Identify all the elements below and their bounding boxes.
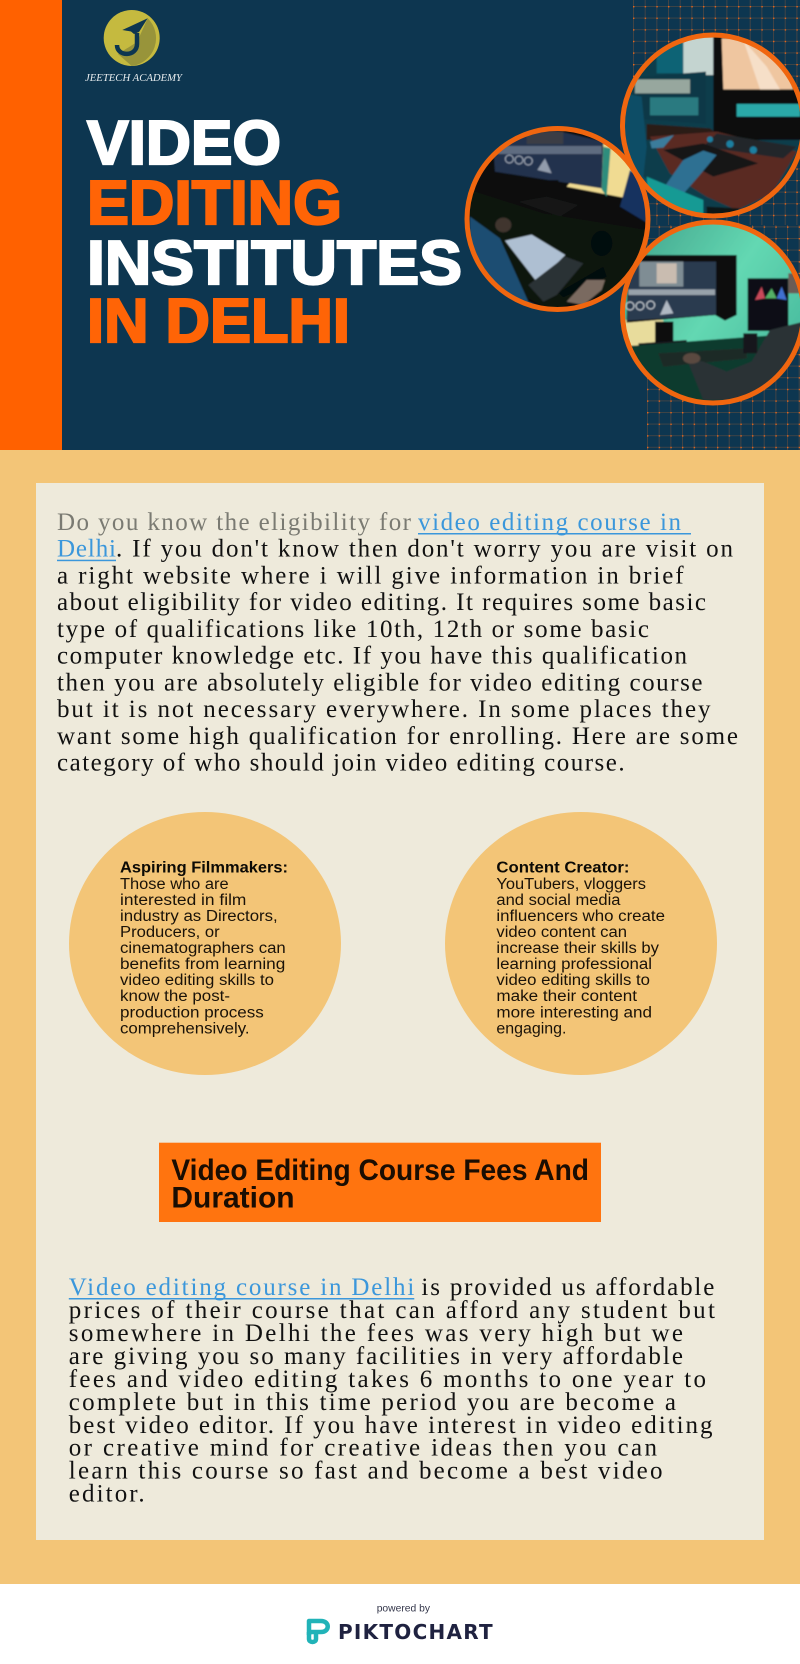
logo wordmark: JEETECH ACADEMY (85, 73, 183, 84)
intro paragraph: about eligibility for video editing. It requires some basic (57, 589, 706, 616)
card body: video editing skills to (496, 972, 650, 989)
intro paragraph: Do you know the eligibility for (57, 509, 412, 536)
card body: Those who are (120, 876, 229, 893)
card heading: Content Creator: (496, 860, 630, 877)
title (87, 109, 462, 356)
intro paragraph (57, 509, 738, 777)
intro paragraph: a right website where i will give information in brief (57, 562, 684, 590)
card body (120, 876, 286, 1037)
card body: know the post- (120, 988, 230, 1005)
card body (496, 876, 665, 1037)
section heading: fees and duration: Video Editing Course Fees And (171, 1154, 589, 1187)
card body: Producers, or (120, 924, 220, 941)
circle card: aspiring filmmakers (69, 812, 341, 1075)
title: IN DELHI (87, 287, 350, 356)
content panel (36, 483, 764, 1540)
footer: powered by Piktochart (0, 1584, 800, 1664)
card body: learning professional (496, 956, 652, 973)
title: VIDEO (87, 109, 281, 178)
card body: cinematographers can (120, 940, 286, 957)
card body: comprehensively. (120, 1020, 250, 1037)
powered by label: powered by (377, 1602, 431, 1614)
intro paragraph: then you are absolutely eligible for video editing course (57, 669, 702, 696)
Piktochart wordmark: PIKTOCHART (338, 1620, 493, 1644)
section heading: fees and duration: Duration (171, 1182, 295, 1215)
card body: more interesting and (496, 1004, 652, 1021)
orange side strip (0, 0, 62, 450)
fees paragraph: or creative mind for creative ideas then you can (69, 1435, 658, 1462)
card body: and social media (496, 892, 621, 909)
card body: benefits from learning (120, 956, 285, 973)
section heading: fees and duration (159, 1143, 601, 1222)
photo circle: top right (620, 30, 800, 220)
logo disc (104, 10, 160, 66)
circle card: content creator (445, 812, 717, 1075)
intro paragraph: . If you don't know then don't worry you are visit on (116, 536, 734, 563)
intro paragraph: computer knowledge etc. If you have this qualification (57, 643, 688, 670)
banner background (0, 0, 800, 450)
inline link: Video editing course in Delhi (69, 1274, 414, 1301)
fees paragraph: learn this course so fast and become a best video (69, 1458, 663, 1485)
fees paragraph: is provided us affordable (421, 1274, 714, 1301)
banner (0, 0, 800, 450)
fees paragraph: fees and video editing takes 6 months to one year to (69, 1366, 706, 1393)
intro paragraph: but it is not necessary everywhere. In some places they (57, 696, 711, 723)
title: INSTITUTES (87, 229, 462, 298)
card body: production process (120, 1004, 264, 1021)
icon: Piktochart mark (309, 1621, 328, 1642)
fees paragraph: prices of their course that can afford any student but (69, 1297, 715, 1324)
card body: make their content (496, 988, 638, 1005)
card body: video content can (496, 924, 627, 941)
fees paragraph: are giving you so many facilities in very affordable (69, 1343, 683, 1370)
fees paragraph: somewhere in Delhi the fees was very high but we (69, 1320, 683, 1347)
card body: industry as Directors, (120, 908, 278, 925)
card body: engaging. (496, 1020, 566, 1037)
fees paragraph: best video editor. If you have interest in video editing (69, 1412, 713, 1439)
photo circle: bottom right (620, 220, 800, 410)
card heading: Aspiring Filmmakers: (120, 860, 288, 877)
photo circle: centre left (463, 123, 653, 313)
inline link: video editing course in (418, 509, 682, 536)
dotted grid pattern (633, 0, 800, 450)
fees paragraph: complete but in this time period you are become a (69, 1389, 676, 1416)
fees paragraph: editor. (69, 1481, 145, 1508)
card body: YouTubers, vloggers (496, 876, 646, 893)
inline link (57, 509, 691, 563)
title: EDITING (87, 169, 342, 238)
logo: Jeetech Academy (85, 10, 183, 84)
card body: interested in film (120, 892, 246, 909)
inline link: Delhi (57, 536, 116, 563)
intro paragraph: type of qualifications like 10th, 12th or some basic (57, 616, 649, 643)
intro paragraph: want some high qualification for enrolling. Here are some (57, 723, 738, 750)
intro paragraph: category of who should join video editing course. (57, 750, 625, 777)
card body: video editing skills to (120, 972, 274, 989)
fees paragraph (69, 1274, 715, 1508)
card body: increase their skills by (496, 940, 659, 957)
card body: influencers who create (496, 908, 665, 925)
